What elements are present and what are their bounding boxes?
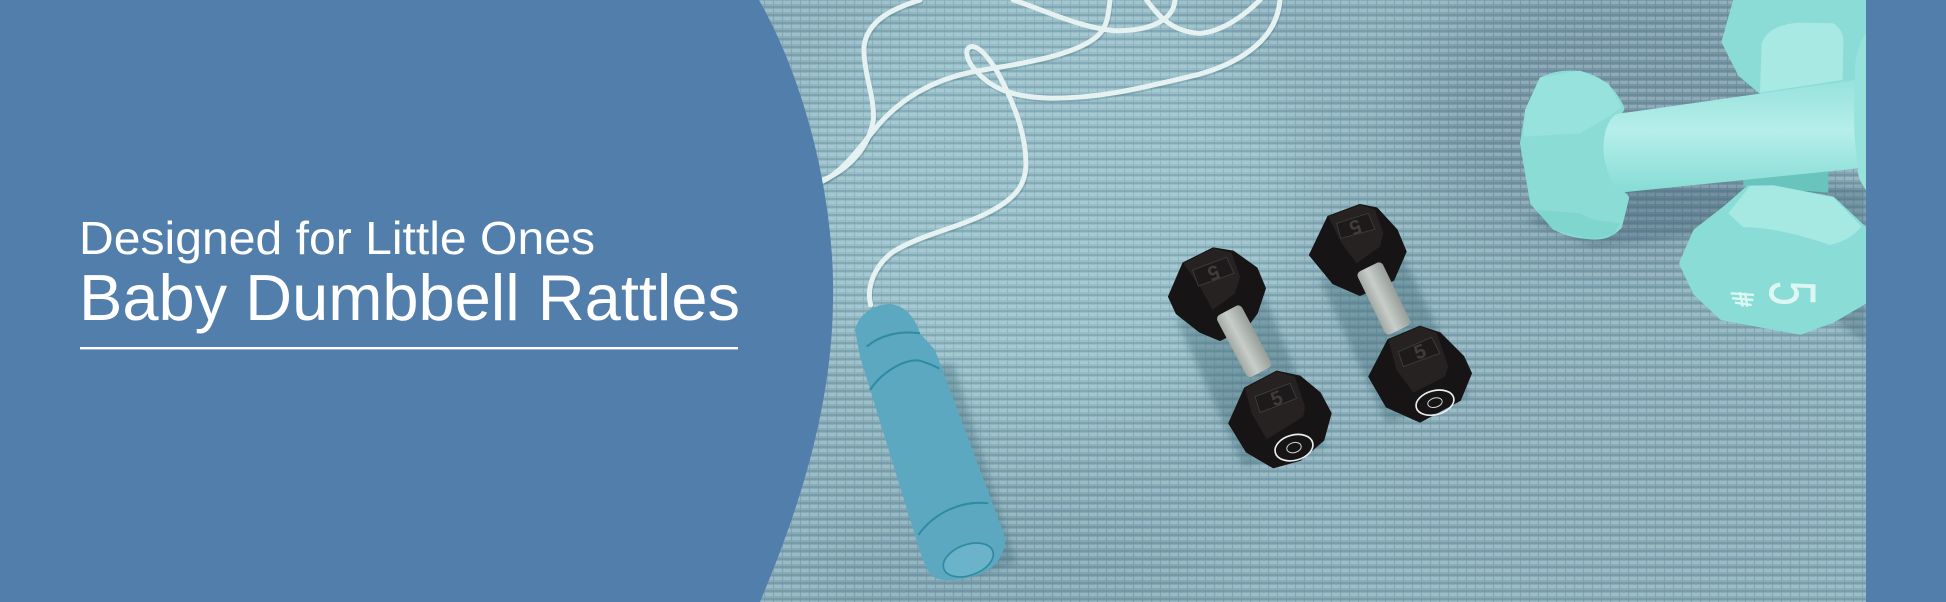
- front dumbbell head left: [1525, 76, 1624, 235]
- bottom dumbbell head: [1684, 190, 1866, 330]
- black dumbbell: right: 5: [1346, 214, 1364, 239]
- brand mark: [1731, 292, 1754, 307]
- yoga mat background: [740, 0, 1870, 602]
- black dumbbell: left: 5: [1204, 260, 1222, 284]
- back dumbbell head: [1726, 0, 1866, 90]
- left blue curved panel: [0, 0, 833, 602]
- teal dumbbells: [1523, 0, 1867, 343]
- jump rope handle: [855, 304, 1017, 583]
- black dumbbell: right: 5: [1411, 340, 1429, 365]
- back dumbbell bar: [1760, 23, 1843, 93]
- title: Baby Dumbbell Rattles: [79, 261, 740, 334]
- front dumbbell far head edge: [1854, 33, 1866, 190]
- title underline: [80, 347, 738, 349]
- subtitle: Designed for Little Ones: [79, 212, 595, 264]
- black dumbbell: left: [1169, 248, 1331, 467]
- right blue band: [1866, 0, 1946, 602]
- weight number 5: 5: [1754, 281, 1828, 306]
- shadowed lower bar: [1743, 170, 1828, 193]
- jump rope cord: [822, 0, 1281, 307]
- front dumbbell bar: [1604, 80, 1858, 193]
- black dumbbell: left: 5: [1268, 387, 1286, 411]
- black dumbbell: right: [1310, 205, 1471, 423]
